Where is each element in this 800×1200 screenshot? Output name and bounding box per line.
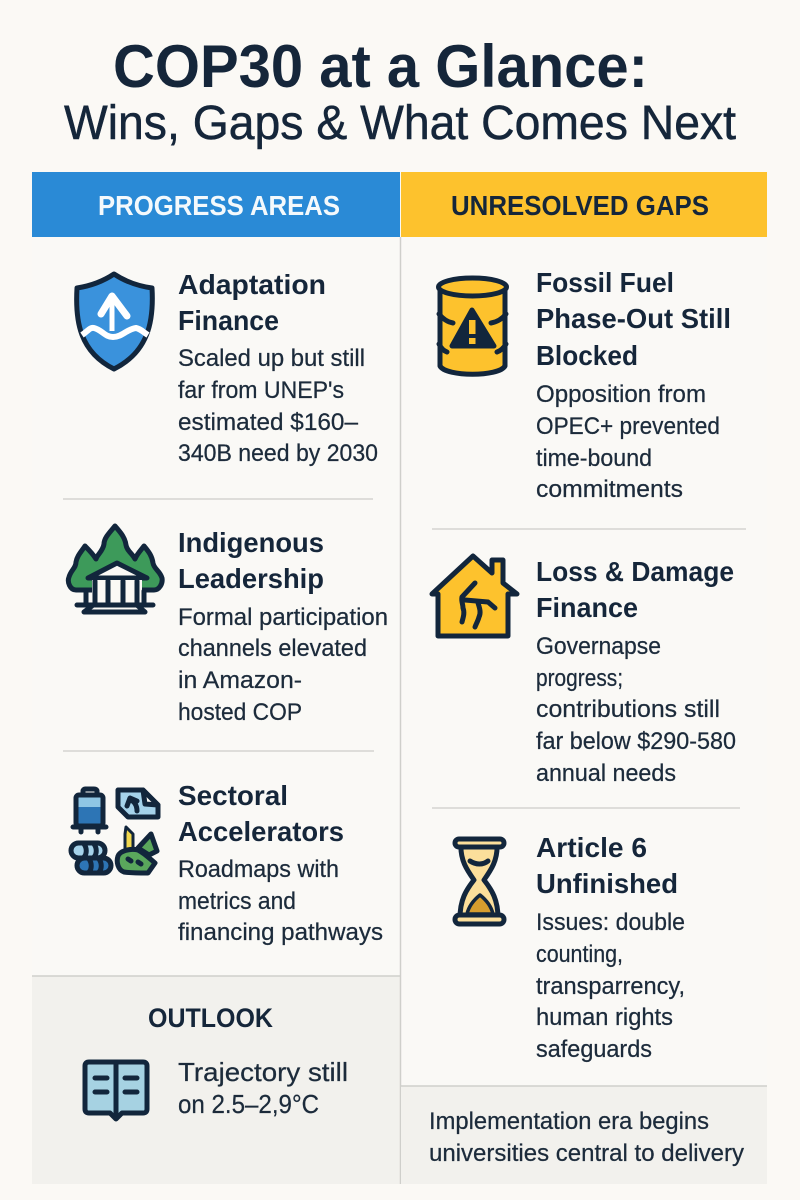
heading: Unfinished: [536, 868, 678, 899]
description: [536, 633, 736, 787]
description: Roadmaps with: [178, 856, 339, 883]
heading: Phase-Out Still: [536, 303, 731, 334]
description: metrics and: [178, 888, 296, 915]
description: far below $290-580: [536, 728, 736, 755]
item: fossil fuel: [438, 267, 731, 503]
heading: [536, 556, 734, 623]
outlook text: [178, 1057, 348, 1119]
description: channels elevated: [178, 635, 367, 662]
heading: Fossil Fuel: [536, 267, 674, 298]
panel: implementation note: [401, 1086, 767, 1184]
description: Issues: double: [536, 909, 685, 936]
heading: Indigenous: [178, 527, 324, 558]
item: article 6: [455, 832, 685, 1063]
description: [178, 604, 388, 726]
panel: progress areas: [32, 172, 400, 946]
title: Wins, Gaps & What Comes Next: [64, 97, 736, 150]
heading: Finance: [536, 592, 638, 623]
panel: unresolved gaps: [401, 172, 767, 1063]
description: [178, 856, 383, 946]
title: [64, 33, 736, 150]
icon: shield with arrow and wave: [77, 274, 152, 369]
description: Formal participation: [178, 604, 388, 631]
description: contributions still: [536, 696, 720, 723]
heading: Adaptation: [178, 269, 326, 300]
icon: coins: [71, 843, 111, 873]
description: hosted COP: [178, 699, 302, 726]
description: financing pathways: [178, 919, 383, 946]
icon: hourglass: [455, 839, 504, 924]
description: in Amazon-: [178, 667, 302, 694]
progress header: [32, 172, 400, 237]
icon: coastline and lighthouse: [117, 827, 157, 873]
description: Governapse: [536, 633, 661, 660]
heading: Sectoral: [178, 780, 288, 811]
title: COP30 at a Glance:: [113, 33, 648, 100]
description: transparrency,: [536, 973, 685, 1000]
description: time-bound: [536, 445, 652, 472]
heading: Accelerators: [178, 816, 344, 847]
description: [536, 909, 685, 1063]
panel: implementation note: universities central to delivery: [429, 1140, 744, 1167]
description: Opposition from: [536, 381, 706, 408]
gaps header: [401, 172, 767, 237]
outlook text: on 2.5–2,9°C: [178, 1089, 319, 1119]
heading: [178, 527, 324, 594]
description: [536, 381, 720, 503]
description: annual needs: [536, 760, 676, 787]
icon: transit: [73, 789, 106, 832]
heading: Finance: [178, 305, 279, 336]
heading: Loss & Damage: [536, 556, 734, 587]
description: commitments: [536, 476, 683, 503]
heading: [536, 267, 731, 371]
item: loss and damage: [432, 556, 736, 787]
heading: Leadership: [178, 563, 324, 594]
heading: Article 6: [536, 832, 647, 863]
heading: [536, 832, 678, 899]
description: human rights: [536, 1004, 673, 1031]
item: adaptation finance: [77, 269, 378, 467]
outlook heading: OUTLOOK: [148, 1003, 273, 1033]
description: [178, 345, 378, 467]
icon: open book: [85, 1062, 147, 1119]
item: sectoral accelerators: [71, 780, 383, 946]
outlook text: Trajectory still: [178, 1057, 348, 1087]
icon: oil barrel with warning: [438, 278, 506, 374]
heading: Blocked: [536, 340, 638, 371]
description: estimated $160–: [178, 409, 359, 436]
panel: outlook: [32, 976, 400, 1184]
description: safeguards: [536, 1036, 652, 1063]
description: Scaled up but still: [178, 345, 365, 372]
heading: [178, 780, 344, 847]
icon: cracked house: [432, 556, 517, 636]
item: indigenous leadership: [68, 526, 388, 726]
icon: trees and temple: [68, 526, 162, 612]
description: 340B need by 2030: [178, 440, 378, 467]
heading: [178, 269, 326, 336]
description: counting,: [536, 941, 623, 968]
gaps header: UNRESOLVED GAPS: [451, 190, 709, 221]
description: far from UNEP's: [178, 377, 344, 404]
description: OPEC+ prevented: [536, 413, 720, 440]
icon: road map: [118, 790, 158, 817]
description: progress;: [536, 665, 623, 692]
panel: implementation note: Implementation era begins: [429, 1108, 709, 1135]
progress header: PROGRESS AREAS: [98, 190, 340, 221]
icon: sector cluster: [71, 789, 158, 873]
